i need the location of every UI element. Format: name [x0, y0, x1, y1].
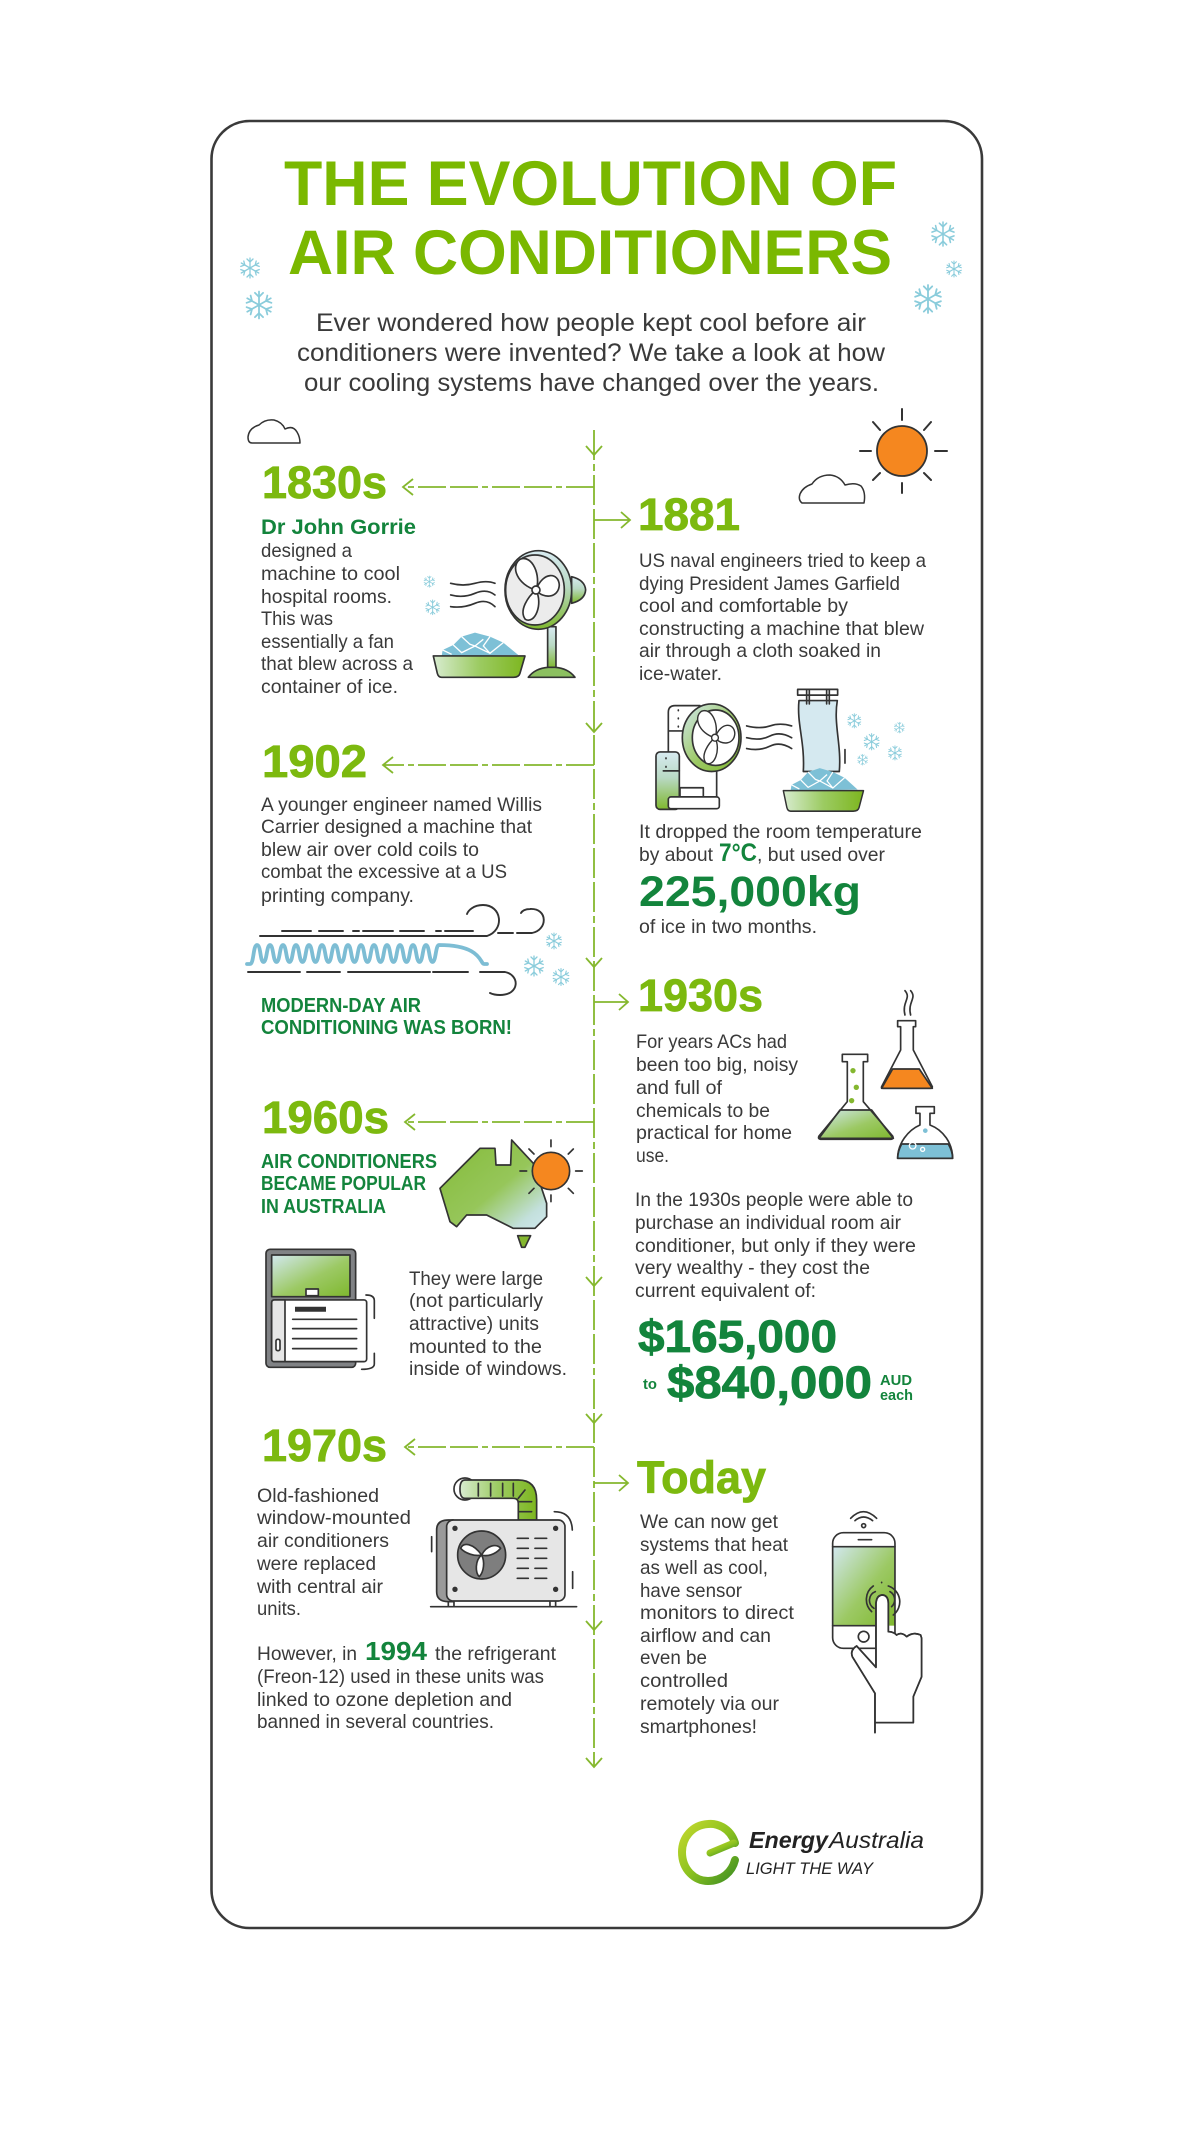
text block: temperature: by about [639, 844, 714, 866]
heading: 1960s: 1960s [262, 1092, 389, 1143]
text block: Garfield: cool and comfortable by [639, 595, 848, 617]
text block: 1994 ban: 1994 [365, 1636, 428, 1666]
text block: Gorrie: designed a [261, 540, 352, 562]
logo: EnergyAustralia: Australia [827, 1827, 924, 1853]
text block: temperature: 7°C [719, 839, 757, 867]
arrow: to 1960s [405, 1114, 594, 1130]
text block: central units: with central air [256, 1576, 384, 1598]
logo: EnergyAustralia [682, 1824, 924, 1881]
text block: central units: air conditioners [257, 1530, 389, 1552]
stat: ice used: 225,000kg [639, 868, 861, 916]
text block: too big: use. [636, 1145, 669, 1167]
text block: smartphones: systems that heat [640, 1534, 789, 1556]
panel: Today [594, 1452, 922, 1738]
text block: Garfield: ice-water. [639, 663, 722, 685]
text block: temperature: , but used over [757, 844, 885, 866]
text block: too big: practical for home [636, 1122, 792, 1144]
icon: window-mounted AC [266, 1249, 374, 1369]
text block: smartphones: remotely via our [640, 1693, 780, 1715]
text block: central units: were replaced [256, 1553, 376, 1575]
text block: Garfield [639, 550, 926, 685]
text block: window units: inside of windows. [409, 1358, 567, 1380]
text block: wealthy: very wealthy - they cost the [635, 1257, 870, 1279]
arrow: to Today [594, 1475, 628, 1491]
intro text: conditioners were invented? We take a look at how [297, 339, 886, 367]
intro text: our cooling systems have changed over the years. [304, 369, 879, 397]
text block: smartphones: controlled [640, 1670, 728, 1692]
title: AIR CONDITIONERS [288, 218, 892, 288]
logo: EnergyAustralia: Energy [749, 1827, 829, 1853]
text block: 1994 ban: the refrigerant [435, 1643, 557, 1665]
text block: Gorrie: essentially a fan [261, 631, 394, 653]
text block: smartphones: We can now get [640, 1511, 779, 1533]
text block: central units: units. [257, 1598, 301, 1620]
icon: central air unit [431, 1478, 577, 1607]
callout: popular in Australia [261, 1151, 437, 1218]
text block: Garfield: air through a cloth soaked in [639, 640, 881, 662]
icon: Australia map and sun [440, 1140, 582, 1247]
stat: price range: to [643, 1376, 657, 1393]
icon: chemical flasks [819, 991, 953, 1158]
text block: Carrier: combat the excessive at a US [261, 861, 507, 883]
text block: wealthy: conditioner, but only if they were [635, 1235, 916, 1257]
arrow: to 1830s [403, 479, 594, 495]
arrow: to 1970s [405, 1439, 594, 1455]
text block: smartphones: even be [640, 1647, 707, 1669]
text block: Gorrie: Dr John Gorrie [261, 516, 416, 539]
text block: Garfield: constructing a machine that blew [639, 618, 925, 640]
arrow: to 1902 [383, 757, 594, 773]
text block: Gorrie: that blew across a [261, 653, 413, 675]
callout: modern-day AC: MODERN-DAY AIR [261, 995, 422, 1017]
text block: 1994 ban: linked to ozone depletion and [257, 1689, 512, 1711]
text block: temperature: It dropped the room temperature [639, 821, 922, 843]
text block: smartphones: as well as cool, [640, 1557, 768, 1579]
text block: smartphones: have sensor [640, 1580, 742, 1602]
arrow: to 1881 [594, 512, 630, 528]
text block: window units: attractive) units [409, 1313, 539, 1335]
text block: Carrier: printing company. [261, 885, 414, 907]
text block: smartphones: airflow and can [640, 1625, 771, 1647]
text block: 1994 ban: (Freon-12) used in these units was [257, 1666, 544, 1688]
text block: central units: window-mounted [256, 1507, 411, 1529]
text block: too big: chemicals to be [636, 1100, 770, 1122]
text block: Gorrie: container of ice. [261, 676, 398, 698]
text block: window units: mounted to the [409, 1336, 542, 1358]
heading: 1930s: 1930s [638, 970, 763, 1021]
title: THE EVOLUTION OF [284, 149, 897, 219]
panel: 1930s [594, 970, 953, 1408]
callout: popular in Australia: BECAME POPULAR [261, 1173, 426, 1195]
icon: fan, wet cloth and ice [656, 689, 904, 811]
text block: window units [409, 1268, 567, 1380]
text block: wealthy: purchase an individual room air [635, 1212, 901, 1234]
text block: wealthy [635, 1189, 916, 1302]
text block: too big: been too big, noisy [636, 1054, 798, 1076]
text block: Gorrie [261, 516, 416, 698]
panel: 1830s [261, 457, 594, 698]
callout: popular in Australia: IN AUSTRALIA [261, 1196, 386, 1218]
stat: price range: $165,000 [638, 1311, 837, 1362]
callout: popular in Australia: AIR CONDITIONERS [261, 1151, 437, 1173]
panel: 1902 [247, 736, 594, 1039]
intro text: Ever wondered how people kept cool before air [316, 309, 866, 337]
heading: 1902: 1902 [262, 736, 367, 787]
text block: too big: For years ACs had [636, 1031, 787, 1053]
text block: Garfield: US naval engineers tried to keep a [639, 550, 926, 572]
stat: price range: AUD [880, 1372, 912, 1389]
text block: too big [636, 1031, 798, 1167]
icon: snowflakes beside title [241, 222, 961, 318]
text block: Gorrie: This was [261, 608, 333, 630]
text block: wealthy: In the 1930s people were able to [635, 1189, 913, 1211]
text block: temperature [639, 821, 922, 867]
text block: wealthy: current equivalent of: [635, 1280, 816, 1302]
page frame [212, 121, 982, 1928]
stat: price range: $840,000 [667, 1357, 872, 1408]
heading: 1881: 1881 [638, 489, 740, 540]
heading: 1970s: 1970s [262, 1420, 387, 1471]
text block: 1994 ban [257, 1636, 557, 1733]
stat: price range: each [880, 1387, 913, 1404]
text block: too big: and full of [636, 1077, 723, 1099]
text block: smartphones: smartphones! [640, 1716, 757, 1738]
icon: right cloud [799, 475, 865, 503]
text block: window units: (not particularly [409, 1290, 543, 1312]
heading: Today: Today [637, 1452, 766, 1503]
callout: modern-day AC: CONDITIONING WAS BORN! [261, 1017, 512, 1039]
text block: smartphones: monitors to direct [640, 1602, 795, 1624]
text block: ice duration: of ice in two months. [639, 916, 817, 938]
stat: price range [638, 1311, 913, 1408]
text block: smartphones [640, 1511, 795, 1738]
icon: sun [860, 409, 947, 493]
text block: Garfield: dying President James Garfield [639, 573, 900, 595]
text block: Carrier [261, 794, 542, 907]
panel: 1881 [594, 489, 926, 938]
panel: 1970s [256, 1420, 594, 1733]
heading: 1830s: 1830s [262, 457, 387, 508]
text block: window units: They were large [409, 1268, 543, 1290]
logo: EnergyAustralia: LIGHT THE WAY [746, 1859, 875, 1878]
text block: 1994 ban: banned in several countries. [257, 1711, 494, 1733]
panel: 1960s [261, 1092, 594, 1380]
text block: Carrier: blew air over cold coils to [261, 839, 479, 861]
intro text [297, 309, 886, 397]
arrow: to 1930s [594, 994, 628, 1010]
icon: left cloud [248, 420, 300, 443]
text block: Gorrie: machine to cool [261, 563, 400, 585]
text block: Carrier: Carrier designed a machine that [261, 816, 533, 838]
icon: smartphone and hand [833, 1512, 922, 1733]
text block: central units [256, 1485, 411, 1620]
icon: cold coil and wind [247, 905, 569, 995]
icon: fan and ice bowl [424, 551, 586, 677]
text block: 1994 ban: However, in [257, 1643, 357, 1665]
timeline spine with arrows [586, 430, 602, 1767]
title [284, 149, 897, 288]
text block: Carrier: A younger engineer named Willis [261, 794, 542, 816]
callout: modern-day AC [261, 995, 512, 1039]
text block: central units: Old-fashioned [257, 1485, 379, 1507]
text block: Gorrie: hospital rooms. [261, 586, 392, 608]
